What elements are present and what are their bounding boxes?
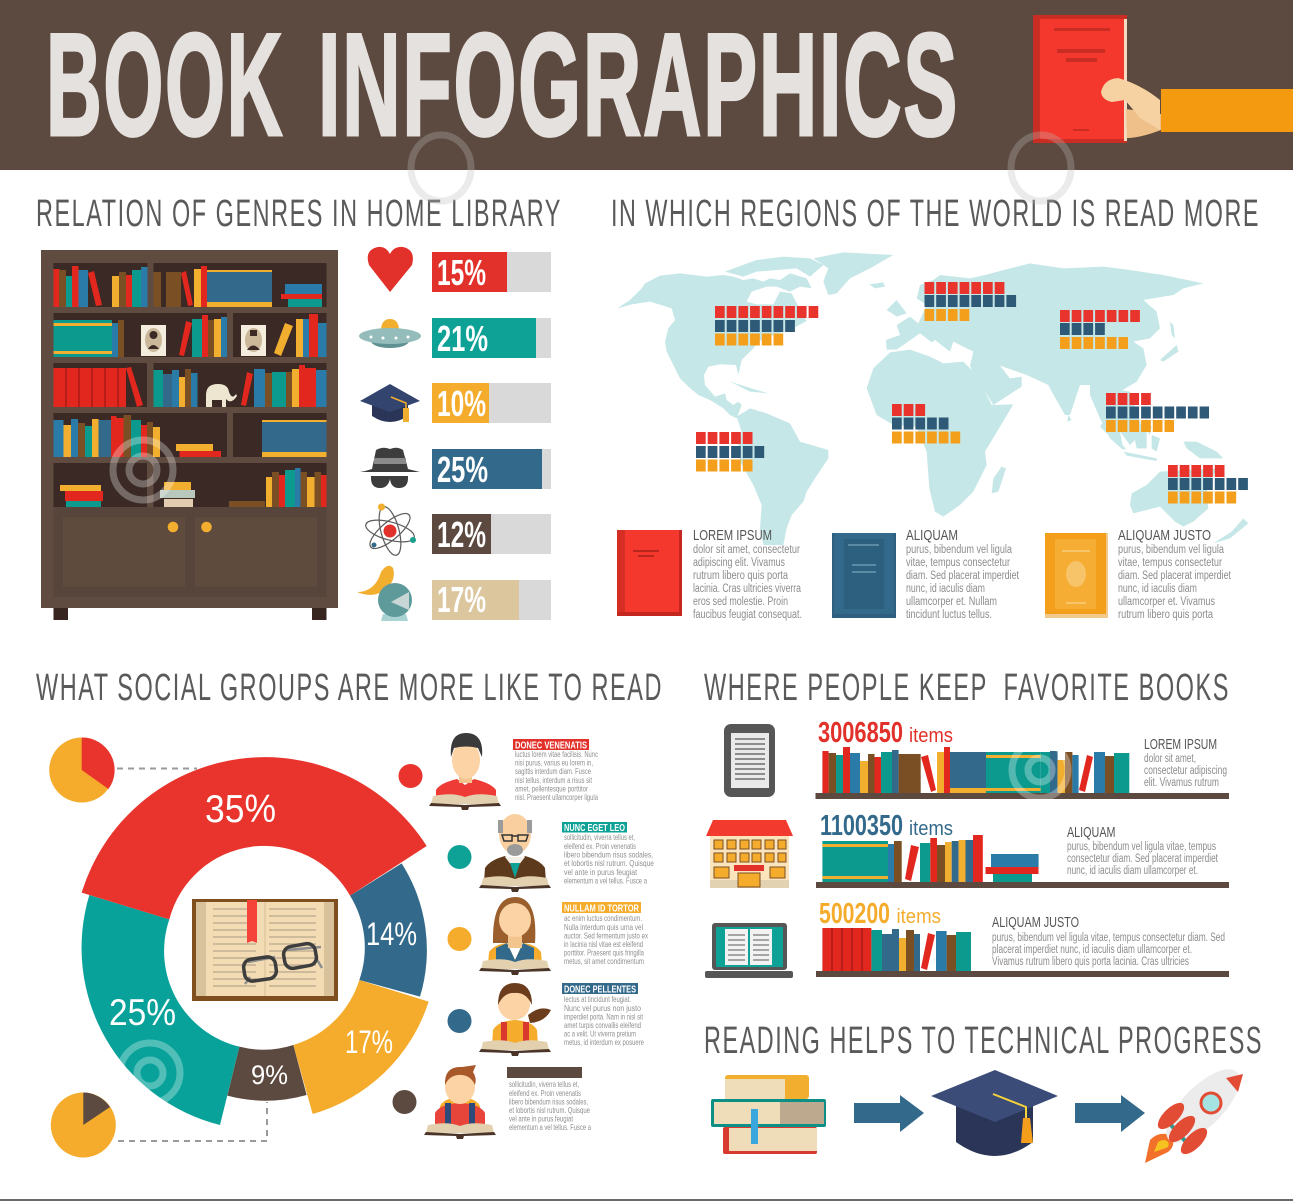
- bar: 12%: [432, 514, 551, 555]
- shelf one text: elit. Vivamus rutrum: [1144, 777, 1219, 789]
- mini pie: top: [49, 737, 115, 802]
- japan: [1160, 345, 1178, 362]
- europe: [924, 288, 1017, 315]
- legend text: aliquam: ullamcorper et. Nullam: [906, 596, 997, 608]
- reader: professor: [479, 814, 551, 892]
- shelf three text: ALIQUAM JUSTO: [992, 915, 1079, 931]
- shelf two with books: [816, 835, 1229, 888]
- indochina and malay peninsula: [1090, 385, 1143, 450]
- text: nullam id tortor: ac enim luctus condimentum.: [564, 913, 642, 923]
- australia: [1168, 471, 1248, 498]
- shelf three text: Vivamus rutrum libero quis porta lacinia. Cras ultricies: [992, 956, 1189, 968]
- shelf three text: placerat imperdiet nunc, id iaculis diam ullamcorper et.: [992, 944, 1192, 956]
- text: unlabelled brown heading: eleifend ex. Proin venenatis: [509, 1088, 581, 1098]
- shelf two text: consectetur diam. Sed placerat imperdiet: [1067, 853, 1219, 865]
- text: donec venenatis: sagittis interdum diam. Fusce: [515, 766, 591, 776]
- icon: atom: [364, 504, 416, 557]
- shelf three text: [992, 915, 1225, 968]
- south america: [696, 438, 765, 466]
- legend text: aliquam justo: rutrum libero quis porta: [1118, 609, 1213, 621]
- legend text: aliquam: ALIQUAM: [906, 528, 958, 544]
- text: nullam id tortor: metus, sit amet condimentum: [564, 956, 644, 966]
- text: unlabelled brown heading: et lobortis nisl rutrum. Quisque: [509, 1105, 590, 1115]
- text: unlabelled brown heading: vel ante in purus feugiat: [509, 1114, 573, 1124]
- title: BOOK: [46, 3, 284, 166]
- text: donec venenatis: nisl. Praesent ullamcorper ligula: [515, 792, 598, 802]
- dot: teal: [448, 845, 472, 869]
- text: nullam id tortor: NULLAM ID TORTOR: [564, 902, 639, 914]
- icon: hand holding red book: [1033, 15, 1293, 143]
- text: donec pellentes: metus, id interdum ex posuere: [564, 1037, 644, 1047]
- readers per region blocks: [696, 288, 1248, 498]
- legend text: lorem ipsum: LOREM IPSUM: [693, 528, 772, 544]
- text: donec pellentes: amet turpis convallis eleifend: [564, 1020, 641, 1030]
- north america: [617, 273, 812, 418]
- shelf one text: LOREM IPSUM: [1144, 737, 1217, 753]
- segment: 14%: [350, 863, 427, 997]
- bar: 10%: [432, 383, 551, 424]
- text: donec pellentes: DONEC PELLENTES: [564, 984, 636, 996]
- philippines: [1145, 418, 1152, 435]
- legend text: lorem ipsum: adipiscing elit. Vivamus: [693, 557, 785, 569]
- heading: social groups: WHAT SOCIAL GROUPS ARE MORE LIKE TO READ: [36, 667, 663, 709]
- text: nunc eget leo: elementum a vel tellus. Fusce a: [564, 876, 647, 886]
- text: donec pellentes: imperdiet porta. Nam in nisl sit: [564, 1012, 643, 1022]
- legend text: aliquam justo: purus, bibendum vel ligula: [1118, 544, 1224, 556]
- count: 500200 items: items: [896, 906, 941, 928]
- icon: graduation cap large: [931, 1070, 1058, 1156]
- new guinea: [1183, 442, 1223, 458]
- australia: [1130, 468, 1217, 527]
- count: 1100350 items: items: [909, 818, 953, 840]
- legend text: lorem ipsum: faucibus feugiat consequat.: [693, 609, 802, 621]
- legend text: aliquam: diam. Sed placerat imperdiet: [906, 570, 1020, 582]
- icon: graduation cap: [360, 384, 420, 422]
- text: unlabelled brown heading: elementum a vel tellus. Fusce a: [509, 1122, 591, 1132]
- borneo: [1133, 432, 1147, 448]
- row 1 books: [54, 266, 322, 307]
- text: donec pellentes: lectus at tincidunt feugiat.: [564, 994, 631, 1004]
- segment: 25%: [82, 895, 239, 1125]
- java: [1123, 452, 1157, 461]
- bar: 17%: [432, 579, 551, 620]
- donut chart: [82, 757, 429, 1125]
- label: 9%: 9%: [251, 1060, 288, 1090]
- icon: knight helmet: [357, 566, 412, 621]
- text: nunc eget leo: [562, 822, 654, 886]
- sakhalin: [1170, 322, 1175, 338]
- row 5 books: [60, 468, 326, 507]
- legend text: lorem ipsum: [693, 528, 802, 621]
- arctic islands: [725, 257, 823, 277]
- text: donec pellentes: [562, 983, 644, 1047]
- greenland: [813, 252, 893, 295]
- mini pie: bottom: [51, 1092, 116, 1158]
- text: nullam id tortor: porttitor. Praesent quis fringilla: [564, 948, 644, 958]
- legend text: aliquam justo: ALIQUAM JUSTO: [1118, 528, 1211, 544]
- text: nullam id tortor: auctor. Sed fermentum justo ex: [564, 930, 648, 940]
- africa: [892, 410, 961, 438]
- text: donec venenatis: DONEC VENENATIS: [515, 740, 587, 752]
- text: nunc eget leo: eleifend ex. Proin venenatis: [564, 841, 636, 851]
- reader: woman: [479, 897, 551, 975]
- bar: 15%: [432, 252, 551, 293]
- africa: [867, 350, 1013, 517]
- text: donec venenatis: luctus lorem vitae facilisis. Nunc: [515, 749, 598, 759]
- sumatra: [1100, 422, 1127, 450]
- watermark spirals: [113, 135, 1071, 1103]
- legend text: lorem ipsum: eros sed molestie. Proin: [693, 596, 788, 608]
- text: nunc eget leo: sollicitudin, viverra tellus et,: [564, 832, 635, 842]
- bookcase illustration: [41, 250, 338, 620]
- bar: 10%: 10%: [437, 383, 486, 424]
- legend: orange book: [1045, 533, 1108, 618]
- shelf two text: [1067, 825, 1219, 877]
- legend text: aliquam justo: [1118, 528, 1232, 621]
- reader: boy: [424, 1065, 496, 1139]
- reader: man in red shirt: [429, 733, 501, 810]
- row 2 books and portraits: [54, 314, 326, 357]
- bar: 15%: 15%: [437, 252, 486, 293]
- legend text: aliquam: [906, 528, 1020, 621]
- text: donec venenatis: amet, pellentesque porttitor: [515, 784, 588, 794]
- text: nullam id tortor: Nulla interdum quis urna vel: [564, 922, 643, 932]
- text: unlabelled brown heading: [507, 1067, 591, 1132]
- text: donec pellentes: ac a velit. Ut viverra pretium: [564, 1028, 636, 1038]
- text: donec pellentes: Nunc vel purus non justo: [564, 1003, 641, 1013]
- icon: open book with glasses: [192, 899, 338, 1001]
- legend text: aliquam justo: vitae, tempus consectetur: [1118, 557, 1222, 569]
- icon: stack of books: [711, 1075, 826, 1154]
- shelf three with books: [816, 928, 1229, 977]
- dot: red: [398, 764, 422, 788]
- dot: blue: [448, 1009, 472, 1033]
- legend text: aliquam justo: diam. Sed placerat imperdiet: [1118, 570, 1232, 582]
- british isles: [887, 300, 907, 317]
- text: donec venenatis: nisl tellus, interdum a risus sit: [515, 775, 592, 785]
- icon: heart: [368, 247, 413, 292]
- north america: [715, 312, 820, 340]
- label: 25%: 25%: [109, 992, 176, 1033]
- count: 500200 items: 500200: [819, 898, 890, 930]
- new zealand: [1213, 518, 1248, 543]
- text: nullam id tortor: [562, 902, 648, 966]
- count: 3006850 items: 3006850: [818, 717, 903, 749]
- reader: girl: [479, 983, 551, 1056]
- label: 14%: 14%: [366, 916, 417, 952]
- bar: 17%: 17%: [437, 579, 486, 620]
- bar: 12%: 12%: [437, 514, 486, 555]
- shelf two text: nunc, id iaculis diam ullamcorper et.: [1067, 865, 1198, 877]
- text: nunc eget leo: et lobortis nisl rutrum. Quisque: [564, 858, 654, 868]
- bar: 21%: 21%: [437, 318, 488, 359]
- caribbean: [730, 382, 768, 393]
- text: unlabelled brown heading: sollicitudin, viverra tellus et,: [509, 1079, 579, 1089]
- bottom rule: [0, 1199, 1293, 1201]
- legend text: aliquam: vitae, tempus consectetur: [906, 557, 1010, 569]
- dot: yellow: [448, 927, 472, 951]
- dot: brown: [392, 1090, 416, 1114]
- world map: [617, 252, 1248, 545]
- shelf one text: dolor sit amet,: [1144, 753, 1196, 765]
- madagascar: [992, 467, 1006, 493]
- shelf two text: purus, bibendum vel ligula vitae, tempus: [1067, 841, 1216, 853]
- segment: 35%: [82, 757, 427, 919]
- heading: genres: RELATION OF GENRES IN HOME LIBRARY: [36, 193, 562, 235]
- bar: 25%: 25%: [437, 449, 488, 490]
- legend text: aliquam: tincidunt luctus tellus.: [906, 609, 992, 621]
- legend text: lorem ipsum: dolor sit amet, consectetur: [693, 544, 800, 556]
- legend text: aliquam: nunc, id iaculis diam: [906, 583, 985, 595]
- icon: ufo: [359, 319, 421, 348]
- text: unlabelled brown heading: libero bibendum risus sodales,: [509, 1096, 588, 1106]
- row 3 books and elephant: [54, 365, 326, 407]
- header banner: [0, 0, 1293, 170]
- asia: [1060, 316, 1140, 343]
- legend text: lorem ipsum: lacinia. Cras ultricies viverra: [693, 583, 801, 595]
- icon: rocket: [1145, 1058, 1251, 1163]
- bar: 25%: [432, 449, 551, 490]
- label: 35%: 35%: [205, 788, 276, 831]
- text: nunc eget leo: vel ante in purus feugiat: [564, 867, 637, 877]
- legend text: lorem ipsum: rutrum libero quis porta: [693, 570, 788, 582]
- text: nunc eget leo: libero bibendum risus sodales,: [564, 850, 653, 860]
- icon: spy hat and glasses: [360, 448, 420, 488]
- icon: laptop: [705, 923, 793, 978]
- legend text: aliquam justo: nunc, id iaculis diam: [1118, 583, 1197, 595]
- legend: blue book: [832, 533, 896, 618]
- arrow: books to cap: [854, 1095, 924, 1132]
- count: 3006850 items: items: [909, 725, 953, 747]
- segment: 9%: [227, 1045, 307, 1101]
- icon: library building: [706, 820, 793, 888]
- count: 1100350 items: 1100350: [820, 810, 903, 842]
- sulawesi: [1152, 435, 1160, 452]
- text: nullam id tortor: in lacinia nisl vitae est eleifend: [564, 939, 643, 949]
- row 4 books: [54, 415, 326, 457]
- icon: e-reader: [724, 724, 775, 797]
- iceland: [869, 282, 885, 288]
- text: donec venenatis: nisi purus, varius eu lorem in,: [515, 758, 593, 768]
- south america: [737, 408, 828, 545]
- shelf two text: ALIQUAM: [1067, 825, 1116, 841]
- legend text: aliquam justo: ullamcorper et. Vivamus: [1118, 596, 1215, 608]
- segment: 17%: [293, 980, 429, 1114]
- label: 17%: 17%: [345, 1024, 393, 1060]
- legend: red book: [617, 530, 682, 616]
- text: donec venenatis: [513, 739, 598, 802]
- shelf one text: consectetur adipiscing: [1144, 765, 1227, 777]
- bar: 21%: [432, 318, 551, 359]
- text: nunc eget leo: NUNC EGET LEO: [564, 822, 625, 834]
- shelf one text: [1144, 737, 1227, 789]
- eurasia: [886, 263, 1203, 415]
- title: [46, 3, 959, 166]
- arrow: cap to rocket: [1075, 1095, 1145, 1132]
- south east asia: [1106, 399, 1209, 426]
- shelf one with books: [816, 747, 1229, 799]
- legend text: aliquam: purus, bibendum vel ligula: [906, 544, 1012, 556]
- sri lanka: [1067, 415, 1072, 422]
